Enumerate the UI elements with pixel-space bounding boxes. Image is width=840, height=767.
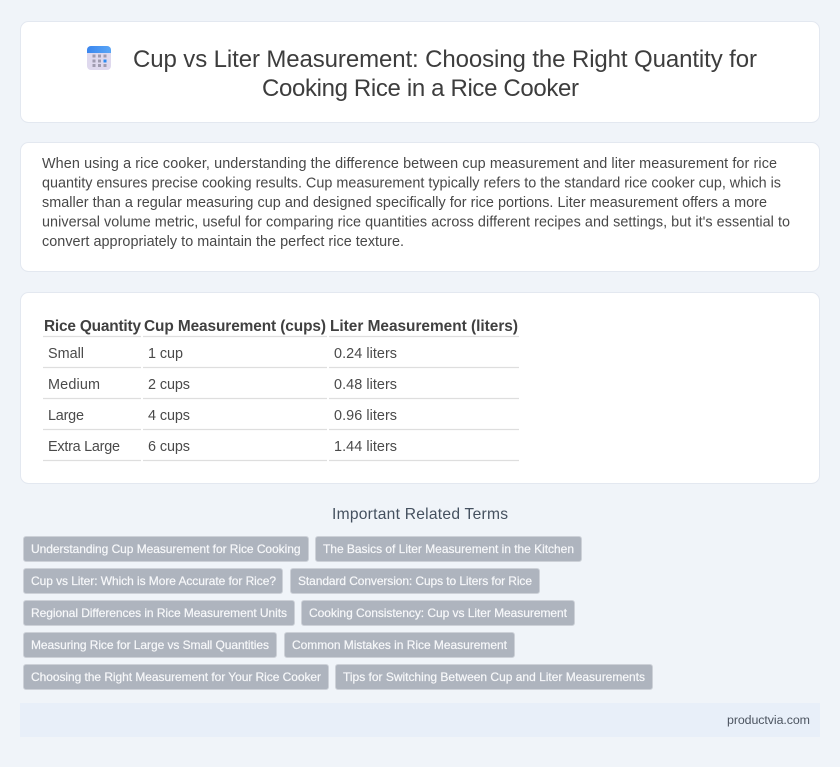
text block: introduction: When using a rice cooker, understanding the difference between cup measurement and liter measurement for rice	[42, 156, 777, 172]
tag	[24, 568, 282, 594]
table row: medium: 0.48 liters	[334, 377, 397, 393]
text block: introduction: universal volume metric, useful for comparing rice quantities across different recipes and settings, but it's essential to	[42, 214, 790, 230]
text block: introduction: quantity ensures precise cooking results. Cup measurement typically refers to the standard rice cooker cup, which is	[42, 176, 781, 192]
table header: Cup Measurement (cups)	[144, 318, 326, 335]
tag: Choosing the Right Measurement for Your Rice Cooker	[31, 670, 321, 684]
table header: Rice Quantity	[44, 318, 141, 335]
footer: productvia.com	[727, 713, 810, 727]
tag	[24, 664, 328, 690]
table row: small: 0.24 liters	[334, 346, 397, 362]
tag	[290, 568, 540, 594]
tag: Common Mistakes in Rice Measurement	[292, 638, 508, 652]
tag	[24, 536, 308, 562]
text block: introduction	[42, 156, 790, 250]
heading: Cup vs Liter Measurement: Choosing the Right Quantity for	[133, 46, 757, 73]
table row: small: 1 cup	[148, 346, 183, 362]
text block: introduction: convert appropriately to maintain the perfect rice texture.	[42, 234, 404, 250]
table row: medium: 2 cups	[148, 377, 190, 393]
table header	[43, 318, 519, 336]
tag	[284, 632, 514, 658]
heading	[133, 46, 757, 102]
tag: Tips for Switching Between Cup and Liter Measurements	[343, 670, 645, 684]
heading: Cooking Rice in a Rice Cooker	[262, 75, 579, 102]
table row: small	[43, 346, 519, 368]
text block: introduction: smaller than a regular measuring cup and designed specifically for rice portions. Liter measurement offers a more	[42, 195, 767, 211]
panel: introduction	[20, 142, 820, 272]
heading: related terms: Important Related Terms	[332, 506, 508, 523]
table row: medium	[43, 377, 519, 398]
tag	[316, 536, 582, 562]
table row: extra large: 6 cups	[148, 439, 190, 455]
table row: small: Small	[48, 346, 84, 362]
footer	[20, 703, 820, 737]
tag: Regional Differences in Rice Measurement Units	[31, 606, 287, 620]
table row: extra large: Extra Large	[48, 439, 120, 455]
tag: Measuring Rice for Large vs Small Quantities	[31, 638, 269, 652]
icon: calendar grid	[87, 46, 111, 70]
table row: large: 0.96 liters	[334, 408, 397, 424]
tag	[336, 664, 652, 690]
tag: Standard Conversion: Cups to Liters for Rice	[298, 574, 532, 588]
table row: large: Large	[48, 408, 84, 424]
tag	[24, 632, 276, 658]
table header: Liter Measurement (liters)	[330, 318, 518, 335]
tag: Cup vs Liter: Which is More Accurate for Rice?	[31, 574, 276, 588]
panel: title	[20, 22, 820, 122]
table row: extra large	[43, 439, 519, 460]
table row: medium: Medium	[48, 377, 100, 393]
table row: extra large: 1.44 liters	[334, 439, 397, 455]
tag: The Basics of Liter Measurement in the Kitchen	[323, 542, 574, 556]
tag	[302, 600, 574, 626]
table row: large: 4 cups	[148, 408, 190, 424]
panel: table	[20, 292, 820, 484]
tag: Understanding Cup Measurement for Rice Cooking	[31, 542, 300, 556]
tags: related terms	[24, 536, 652, 690]
tag	[24, 600, 294, 626]
table row: large	[43, 408, 519, 430]
tag: Cooking Consistency: Cup vs Liter Measurement	[309, 606, 568, 620]
